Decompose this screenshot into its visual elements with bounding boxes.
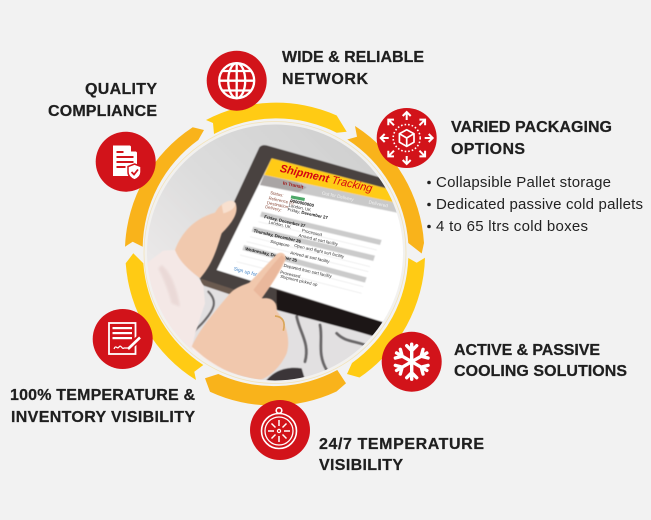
circular ring of six arrows — [125, 103, 425, 406]
heading: wide and reliable network: WIDE & RELIABLE — [282, 49, 424, 66]
heading: quality compliance: COMPLIANCE — [48, 103, 157, 120]
status tabs: In Transit — [282, 180, 304, 190]
photo: hands using tablet showing shipment tracking — [140, 117, 420, 390]
status tabs: Out for Delivery — [321, 190, 355, 202]
status badge — [291, 195, 305, 201]
shipment details: Processed — [301, 228, 323, 237]
marble surface — [194, 314, 266, 380]
shipment details: London, UK — [288, 203, 312, 212]
shipment details: Open and flight sort facility — [294, 243, 345, 259]
icon: quality compliance document — [96, 132, 156, 192]
heading: active and passive cooling solutions: COOLING SOLUTIONS — [454, 363, 627, 380]
shipment details: Wednesday, December 25 — [245, 246, 298, 263]
heading: 24/7 temperature visibility: VISIBILITY — [319, 457, 403, 474]
bullet list: packaging options: Collapsible Pallet storage — [436, 174, 611, 191]
heading: 100% temperature and inventory visibility: 100% TEMPERATURE & — [10, 387, 195, 404]
arrow segment: upper left — [125, 127, 204, 247]
screen table lines — [237, 222, 377, 293]
table bands — [260, 212, 382, 245]
arrow segment: bottom — [205, 370, 346, 406]
shipment details: Thursday, December 26 — [253, 228, 302, 244]
shipment details: Departed from sort facility — [283, 263, 333, 279]
back hand and thumb — [175, 201, 237, 278]
shipment details: London, UK — [268, 219, 292, 229]
heading: varied packaging options — [451, 119, 612, 158]
shipment details — [233, 190, 345, 287]
status tabs: Delivered — [368, 199, 389, 208]
sleeve — [148, 250, 205, 350]
arrow segment: lower right — [347, 258, 425, 378]
tracking header — [263, 158, 393, 203]
heading: wide and reliable network: NETWORK — [282, 71, 368, 88]
icon: packaging box with arrows — [377, 108, 437, 168]
shipment details: Arrived at sort facility — [298, 233, 339, 247]
shipment details: Friday, December 27 — [287, 207, 329, 220]
shipment details: Singapore — [270, 239, 291, 248]
shipment details: Destination: — [266, 200, 290, 210]
ring on finger — [275, 316, 284, 331]
bullet list: packaging options — [427, 174, 643, 235]
shipment tracking title: Shipment Tracking — [279, 163, 374, 195]
heading: 100% temperature and inventory visibility: INVENTORY VISIBILITY — [11, 409, 195, 426]
shipment details: Arrived at sort facility — [290, 250, 331, 264]
shipment details: Reference ID: — [268, 195, 295, 206]
icon: compass temperature gauge — [250, 400, 310, 460]
heading: active and passive cooling solutions: ACTIVE & PASSIVE — [454, 342, 600, 359]
heading: wide and reliable network — [282, 49, 424, 88]
shipment details: Status: — [270, 190, 284, 198]
heading: 24/7 temperature visibility: 24/7 TEMPERATURE — [319, 436, 484, 453]
tablet body — [199, 144, 386, 336]
icon: globe network — [207, 51, 267, 111]
shipment details: Shipment picked up — [280, 274, 319, 287]
shipment details: Sign up for Track — [233, 266, 271, 282]
status tabs — [282, 180, 389, 208]
pointing hand — [192, 253, 288, 380]
icon: snowflake cooling — [382, 332, 442, 392]
heading: 100% temperature and inventory visibility — [10, 387, 195, 426]
heading: varied packaging options: VARIED PACKAGING — [451, 119, 612, 136]
heading: quality compliance — [48, 81, 157, 120]
arrow segment: upper right — [347, 126, 424, 254]
heading: active and passive cooling solutions — [454, 342, 627, 380]
shipment details: Delivery: — [265, 204, 282, 212]
arrow segment: lower left — [126, 253, 203, 380]
shipment details: Friday, December 27 — [264, 214, 306, 229]
tablet screen — [216, 158, 403, 323]
shipment details: Processed — [280, 269, 301, 279]
bullet list: packaging options: 4 to 65 ltrs cold boxes — [436, 218, 588, 235]
bullet list: packaging options: Dedicated passive cold pallets — [436, 196, 643, 213]
photo frame ring — [144, 122, 406, 384]
shipment details: 0000000000 — [290, 198, 315, 208]
heading: quality compliance: QUALITY — [85, 81, 157, 98]
heading: 24/7 temperature visibility — [319, 436, 484, 474]
arrow segment: top — [206, 103, 347, 134]
heading: varied packaging options: OPTIONS — [451, 141, 525, 158]
icon: inventory report with pen — [93, 309, 153, 369]
